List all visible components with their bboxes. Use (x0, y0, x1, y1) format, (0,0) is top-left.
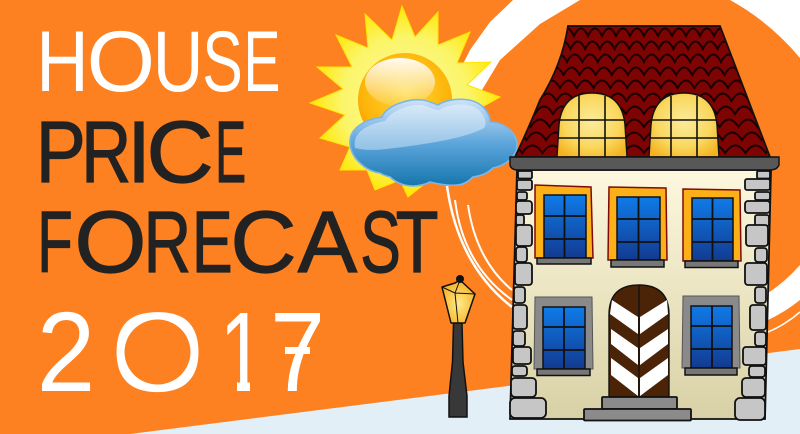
cloud body (350, 99, 517, 186)
lamp knob (456, 275, 464, 283)
lower window right (682, 296, 740, 375)
icon: street lamp (442, 275, 475, 417)
white brush ring (447, 0, 800, 332)
title: FORECAST: T (396, 194, 438, 291)
title: year 2017: 0 (110, 289, 205, 415)
title: year 2017 (37, 289, 325, 415)
title: FORECAST: F (37, 194, 73, 291)
sun gloss (365, 58, 435, 106)
title: FORECAST: S (360, 194, 401, 291)
door steps (584, 397, 691, 420)
roof (502, 26, 786, 157)
left quoin stones (510, 171, 546, 418)
right quoin stones (735, 171, 770, 420)
lamp head (442, 280, 475, 323)
title: year 2017: 7 (270, 289, 325, 415)
dormer window left (557, 93, 627, 157)
house (502, 26, 786, 420)
title: HOUSE: H (36, 14, 89, 110)
title: HOUSE: E (244, 14, 280, 110)
title: PRICE: C (146, 104, 214, 201)
title: year 2017: 2 (37, 289, 95, 415)
icon: sun behind cloud (310, 6, 517, 197)
wall (510, 170, 771, 419)
upper window 3 (683, 189, 741, 268)
title: PRICE: E (215, 104, 246, 201)
dormer window right (649, 93, 719, 157)
title: PRICE: R (81, 104, 131, 201)
cloud highlight (355, 104, 486, 150)
title: HOUSE: O (87, 14, 155, 110)
title: FORECAST: R (144, 194, 191, 291)
pale ground wedge (130, 349, 800, 434)
lamp post (449, 323, 467, 417)
title: PRICE: P (36, 104, 86, 201)
title: FORECAST: E (192, 194, 233, 291)
title: PRICE: I (127, 104, 151, 201)
lower window left (534, 297, 593, 376)
title: FORECAST: A (298, 194, 357, 291)
title: HOUSE: U (153, 14, 204, 110)
title: FORECAST: O (74, 194, 146, 291)
upper window 2 (608, 187, 667, 267)
title: FORECAST: C (230, 194, 297, 291)
cornice (510, 157, 779, 170)
door chevrons (610, 300, 668, 396)
roof tiles (519, 28, 768, 155)
upper window 1 (535, 185, 593, 264)
sun rays (310, 6, 500, 197)
title: year 2017: 1 (220, 289, 265, 415)
door (609, 285, 669, 397)
sun disk (358, 53, 452, 147)
title: HOUSE: S (202, 14, 243, 110)
